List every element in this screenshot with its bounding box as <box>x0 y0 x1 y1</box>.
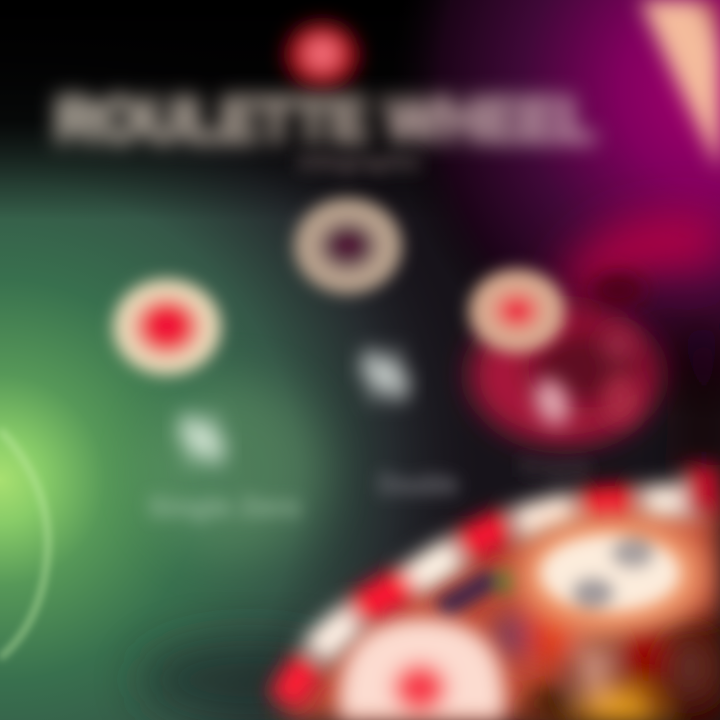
ball highlight <box>529 274 644 430</box>
wheel ring <box>470 305 660 445</box>
chip: bottom left <box>339 618 505 720</box>
title: ROULETTE WHEEL <box>55 86 595 155</box>
chip base <box>280 500 720 720</box>
caption: left: Single Zero <box>148 491 300 522</box>
chip: upper right <box>518 513 706 637</box>
percent mark: centre: % <box>362 338 408 412</box>
caption: centre: Double <box>378 468 458 501</box>
red roulette wheel <box>470 218 720 480</box>
caption: right: Triple <box>518 455 592 482</box>
subtitle: Infographic <box>298 149 422 176</box>
step chip: left <box>113 279 221 375</box>
swirl band <box>555 218 720 480</box>
glowing green arc <box>0 430 48 658</box>
logo mark <box>286 23 358 87</box>
outer chip edge segments <box>285 465 702 703</box>
skin toned stripe, top right <box>640 0 720 170</box>
step chip: top centre <box>294 198 402 294</box>
large poker chips, bottom right <box>280 465 720 720</box>
dark strip between chips <box>440 568 516 610</box>
percent mark: left: % <box>180 402 224 476</box>
warm details <box>495 600 720 720</box>
step chip: right <box>469 269 565 353</box>
